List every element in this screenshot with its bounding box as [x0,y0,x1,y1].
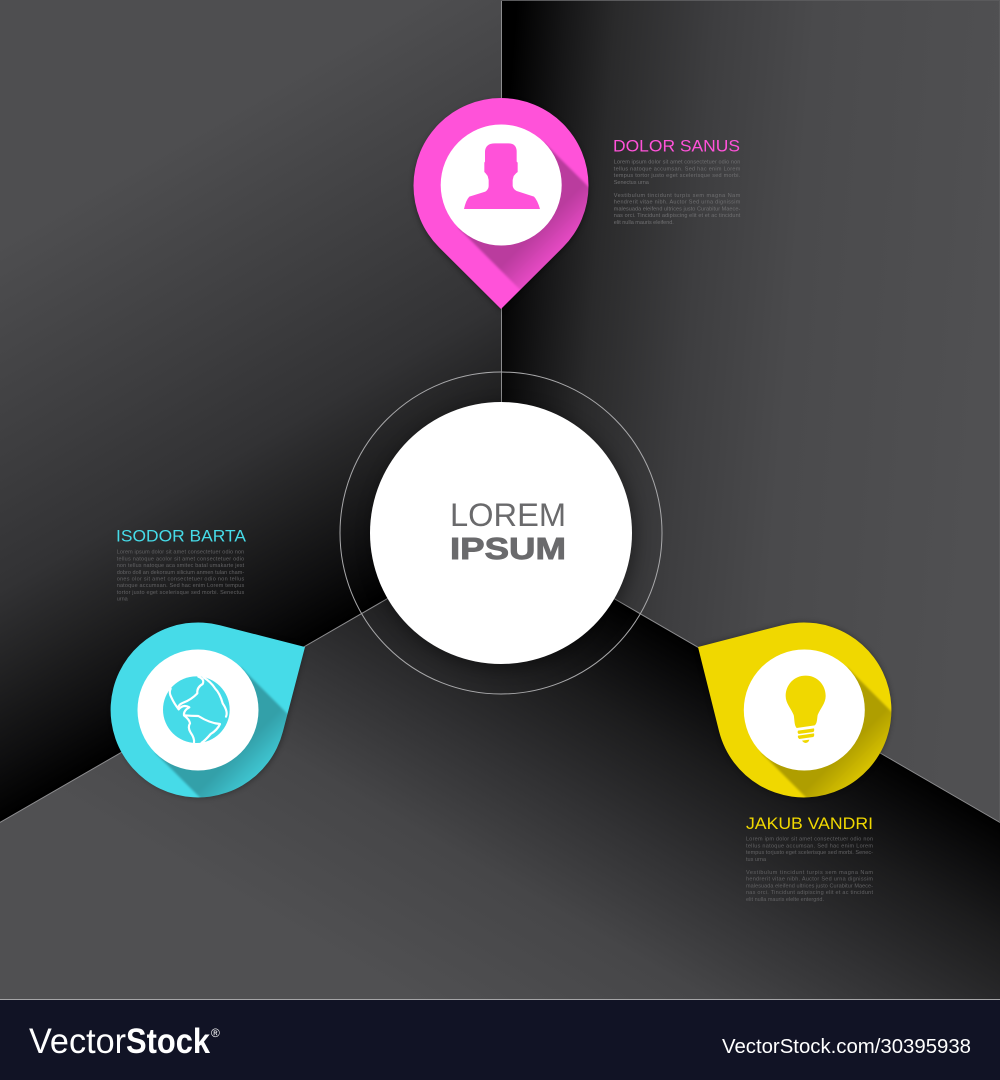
body copy: Lorem ipsum dolor sit amet consectetuer odio non [614,160,740,166]
body copy: nas orci. Tincidunt adipiscing elit et ac tincidunt [746,890,873,896]
pin: cyan globe [110,622,306,799]
long shadow [154,666,288,798]
panel: bottom background [0,533,1000,999]
white centre circle [370,402,632,664]
body copy [614,160,741,226]
hub title: IPSUM [450,531,566,566]
body copy: Senectus urna [614,180,650,186]
body copy: tus urna [746,857,767,863]
outer ring [340,372,662,694]
logo: VectorStock: ® [211,1026,220,1040]
pin shadow [698,622,891,797]
panel: top left background [0,0,501,822]
body copy: tellus natoque acolor sit amet consectetuer odio [117,556,244,562]
body copy: ones olor sit amet consectetuer odio non tellus [117,576,244,582]
text block: Isodor Barta [116,527,247,603]
pin body [111,622,305,797]
logo: VectorStock: Vector [29,1022,126,1061]
body copy: non tellus natoque aca smitec batal umakarte jest [117,563,245,569]
hub shadow [371,405,635,669]
body copy: tellus natoque accumsan. Sed hac enim Lorem [614,166,741,172]
body copy [117,550,245,603]
white disc [441,124,562,246]
pin body [414,98,589,309]
body copy: natoque accumsan. Sed hac enim Lorem tempus [117,583,244,589]
heading: DOLOR SANUS [613,136,740,156]
body copy: Lorem ipm dolor sit amet consectetuer odio non [746,837,873,843]
hub title: LOREM [450,497,566,533]
white disc [138,650,258,770]
body copy: tortor justo eget scelerisque sed morbi. Senectus [117,590,244,596]
heading: ISODOR BARTA [116,527,247,546]
body copy: Vestibulum tincidunt turpis sem magna Nam [614,193,741,199]
pin: yellow bulb [697,621,893,798]
pin shadow [414,101,588,311]
white disc [744,650,865,770]
body copy: elit nulla mauris elelte entergrid. [746,897,824,903]
pin body [698,622,891,797]
body copy: tempus tortor justo eget scelerisque sed morbi. [614,173,741,179]
body copy: Lorem ipsum dolor sit amet consectetuer odio non [117,550,244,556]
body copy: malesuada eleifend ultrices justo Curabitur Maece- [746,883,873,889]
body copy: hendrerit vitae nibh. Auctor Sed urna dignissim [614,200,741,206]
watermark footer bar [0,1000,1000,1080]
body copy: tellus natoque accumsan. Sed hac enim Lorem [746,843,873,849]
body copy: urna [117,597,129,603]
body copy: dobro doll an dekorsum silicium anmen tulan cham- [117,570,244,576]
icon: person [464,143,540,209]
body copy: tempus torjusto eget scelerisque sed morbi. Senec- [746,850,873,856]
text block: Dolor Sanus [613,136,741,226]
panel: top right background [501,0,1000,822]
body copy: elit nulla mauris eleifend. [614,220,674,226]
body copy: hendrerit vitae nibh. Auctor Sed urna dignissim [746,877,873,883]
logo: VectorStock: Stock [126,1022,210,1061]
body copy [746,837,873,903]
long shadow [761,667,892,798]
icon: light bulb [786,676,826,743]
body copy: Vestibulum tincidunt turpis sem magna Nam [746,870,873,876]
central hub [340,372,662,694]
icon: globe [163,676,230,743]
long shadow [458,142,588,290]
body copy: malesuada eleifend ultrices justo Curabitur Maece- [614,206,740,212]
hub title [450,497,566,566]
pin shadow [112,623,305,798]
pin: pink person [412,98,588,312]
body copy: nas orci. Tincidunt adipiscing elit et et ac tincidunt [614,213,741,219]
logo: VectorStock [29,1022,220,1061]
heading: JAKUB VANDRI [746,814,873,833]
text block: Jakub Vandri [746,814,873,903]
stock image url: VectorStock.com/30395938 [722,1036,971,1058]
